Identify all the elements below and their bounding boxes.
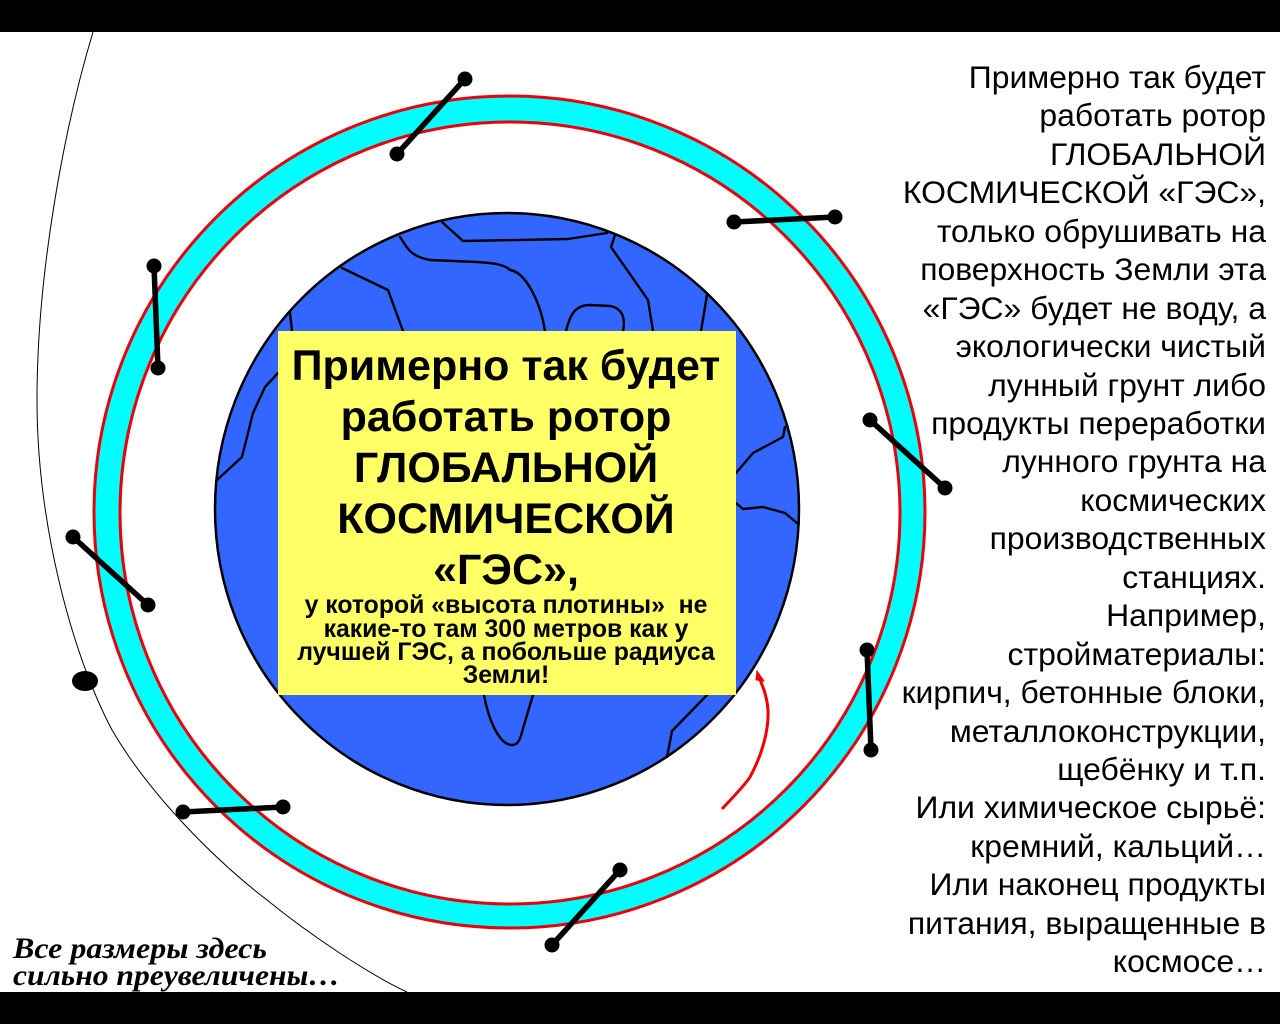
right explanatory text: питания, выращенные в xyxy=(908,905,1266,941)
right explanatory text: только обрушивать на xyxy=(937,213,1266,249)
Earth globe xyxy=(215,213,799,805)
rotor ring xyxy=(94,96,925,928)
top black bar xyxy=(0,0,1280,32)
right explanatory text: кирпич, бетонные блоки, xyxy=(902,674,1266,710)
segment top right xyxy=(726,210,842,230)
callout body text: Земли! xyxy=(463,662,549,689)
right explanatory text: производственных xyxy=(990,520,1266,556)
segment upper left xyxy=(146,258,166,376)
segment lower right xyxy=(860,642,878,758)
moon on orbit xyxy=(72,671,98,691)
right explanatory text: ГЛОБАЛЬНОЙ xyxy=(1050,136,1266,172)
segment top xyxy=(390,72,472,162)
callout heading xyxy=(292,342,720,594)
right explanatory text: Например, xyxy=(1106,597,1266,633)
segment lower left xyxy=(176,800,290,820)
callout heading: «ГЭС», xyxy=(433,546,579,594)
right explanatory text: космических xyxy=(1080,482,1266,518)
right explanatory text: Примерно так будет xyxy=(969,59,1266,95)
segment right xyxy=(862,412,952,496)
right explanatory text: работать ротор xyxy=(1039,97,1266,133)
callout heading: Примерно так будет xyxy=(292,342,720,390)
right explanatory text: «ГЭС» будет не воду, а xyxy=(923,290,1266,326)
right explanatory text: Или химическое сырьё: xyxy=(916,789,1266,825)
segment left xyxy=(66,530,156,612)
orbit curve xyxy=(37,32,407,992)
right explanatory text: поверхность Земли эта xyxy=(920,251,1266,287)
right explanatory text: продукты переработки xyxy=(931,405,1266,441)
right explanatory text xyxy=(902,59,1266,979)
callout heading: КОСМИЧЕСКОЙ xyxy=(337,494,675,543)
right explanatory text: лунный грунт либо xyxy=(988,367,1266,403)
callout heading: ГЛОБАЛЬНОЙ xyxy=(354,443,658,492)
yellow callout box xyxy=(278,331,736,695)
right explanatory text: Или наконец продукты xyxy=(929,866,1266,902)
right explanatory text: металлоконструкции, xyxy=(950,713,1266,749)
footnote: Все размеры здесь xyxy=(12,932,267,965)
callout body text: какие-то там 300 метров как у xyxy=(324,616,689,643)
right explanatory text: лунного грунта на xyxy=(1002,443,1266,479)
right explanatory text: космосе… xyxy=(1113,943,1266,979)
segment bottom xyxy=(544,862,628,952)
rotor segments xyxy=(66,72,952,952)
right explanatory text: КОСМИЧЕСКОЙ «ГЭС», xyxy=(903,174,1266,210)
callout body text: лучшей ГЭС, а побольше радиуса xyxy=(297,639,715,666)
footnote xyxy=(12,932,340,992)
right explanatory text: кремний, кальций… xyxy=(970,828,1266,864)
footnote: сильно преувеличены… xyxy=(13,959,340,992)
right explanatory text: экологически чистый xyxy=(956,328,1266,364)
callout body text: у которой «высота плотины» не xyxy=(305,592,707,619)
continent outlines xyxy=(217,222,797,757)
callout body text xyxy=(297,592,715,689)
right explanatory text: стройматериалы: xyxy=(1008,636,1266,672)
bottom black bar xyxy=(0,992,1280,1024)
callout heading: работать ротор xyxy=(341,393,671,441)
rotation arrow xyxy=(722,671,768,809)
right explanatory text: станциях. xyxy=(1122,559,1266,595)
right explanatory text: щебёнку и т.п. xyxy=(1057,751,1266,787)
